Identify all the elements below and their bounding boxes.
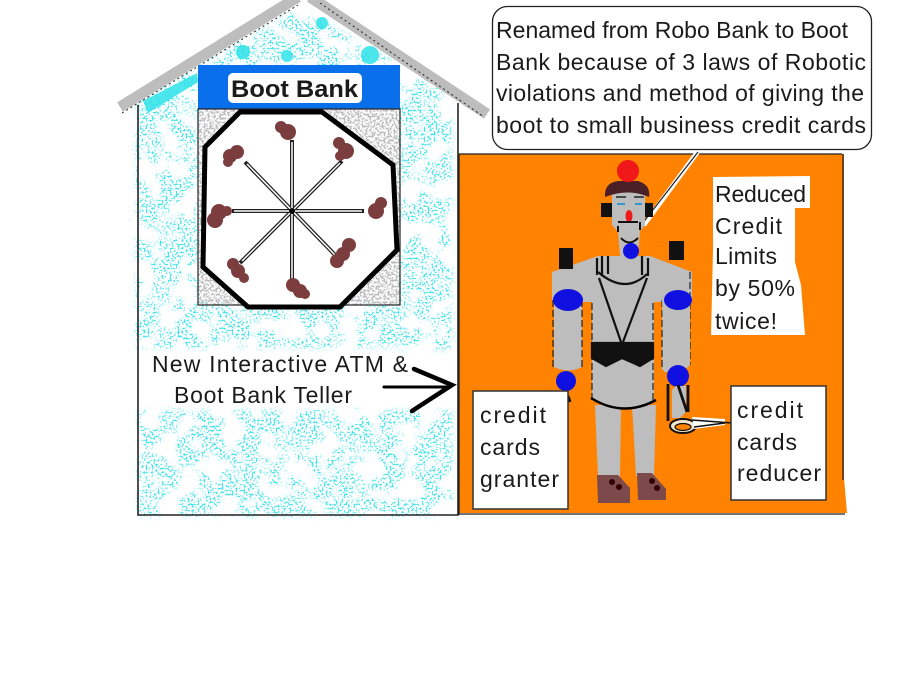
arrow to teller: [384, 369, 452, 411]
box: credit cards reducer: credit: [737, 397, 804, 423]
label: New Interactive ATM and Boot Bank Teller: New Interactive ATM &: [152, 351, 408, 377]
callout: renamed explanation: Renamed from Robo Bank to Boot: [496, 17, 849, 43]
box: credit cards granter: granter: [480, 466, 559, 492]
callout: renamed explanation: boot to small business credit cards: [496, 112, 866, 138]
solid cyan paint spots under roof: [143, 17, 379, 113]
box: credit cards granter: credit: [480, 402, 547, 428]
roof: [120, 0, 487, 117]
box: credit cards reducer: cards: [737, 429, 797, 455]
wall outline: [138, 103, 458, 515]
robot shoulder pads: [559, 241, 684, 269]
callout: renamed explanation: Bank because of 3 laws of Robotic: [496, 49, 866, 75]
callout: renamed explanation: [492, 6, 872, 226]
robot teller: [552, 160, 732, 503]
panel: orange teller room: [459, 154, 847, 515]
robot legs: [595, 405, 656, 478]
box: credit cards reducer: [731, 386, 826, 500]
callout: renamed explanation: violations and method of giving the: [496, 80, 864, 106]
note: reduced credit limits: Credit: [715, 213, 783, 239]
ATM wheel: [203, 112, 397, 307]
box: credit cards reducer: reducer: [737, 460, 821, 486]
label: New Interactive ATM and Boot Bank Teller: [152, 351, 408, 408]
note: reduced credit limits: [711, 176, 810, 335]
boots on spokes: [207, 121, 387, 299]
sign: Boot Bank: Boot Bank: [231, 76, 359, 103]
robot blue joints: [553, 243, 692, 391]
label: New Interactive ATM and Boot Bank Teller: Boot Bank Teller: [174, 382, 352, 408]
robot neck and head: [601, 160, 653, 256]
panel: bank building: [120, 0, 487, 516]
note: reduced credit limits: by 50%: [715, 275, 795, 301]
robot boots: [597, 473, 666, 503]
robot harness: [592, 256, 653, 366]
note: reduced credit limits: Limits: [715, 243, 777, 269]
note: reduced credit limits: twice!: [715, 308, 777, 334]
cyan speckled wall texture: [136, 8, 452, 516]
ATM gray backing: [198, 109, 400, 305]
robot torso and arms: [552, 256, 692, 409]
note: reduced credit limits: Reduced: [715, 181, 806, 207]
box: credit cards granter: [473, 391, 570, 509]
wheel spokes: [232, 140, 364, 282]
scissors: credit card reducer: [668, 384, 732, 433]
box: credit cards granter: cards: [480, 434, 540, 460]
sign: Boot Bank: [198, 65, 400, 109]
